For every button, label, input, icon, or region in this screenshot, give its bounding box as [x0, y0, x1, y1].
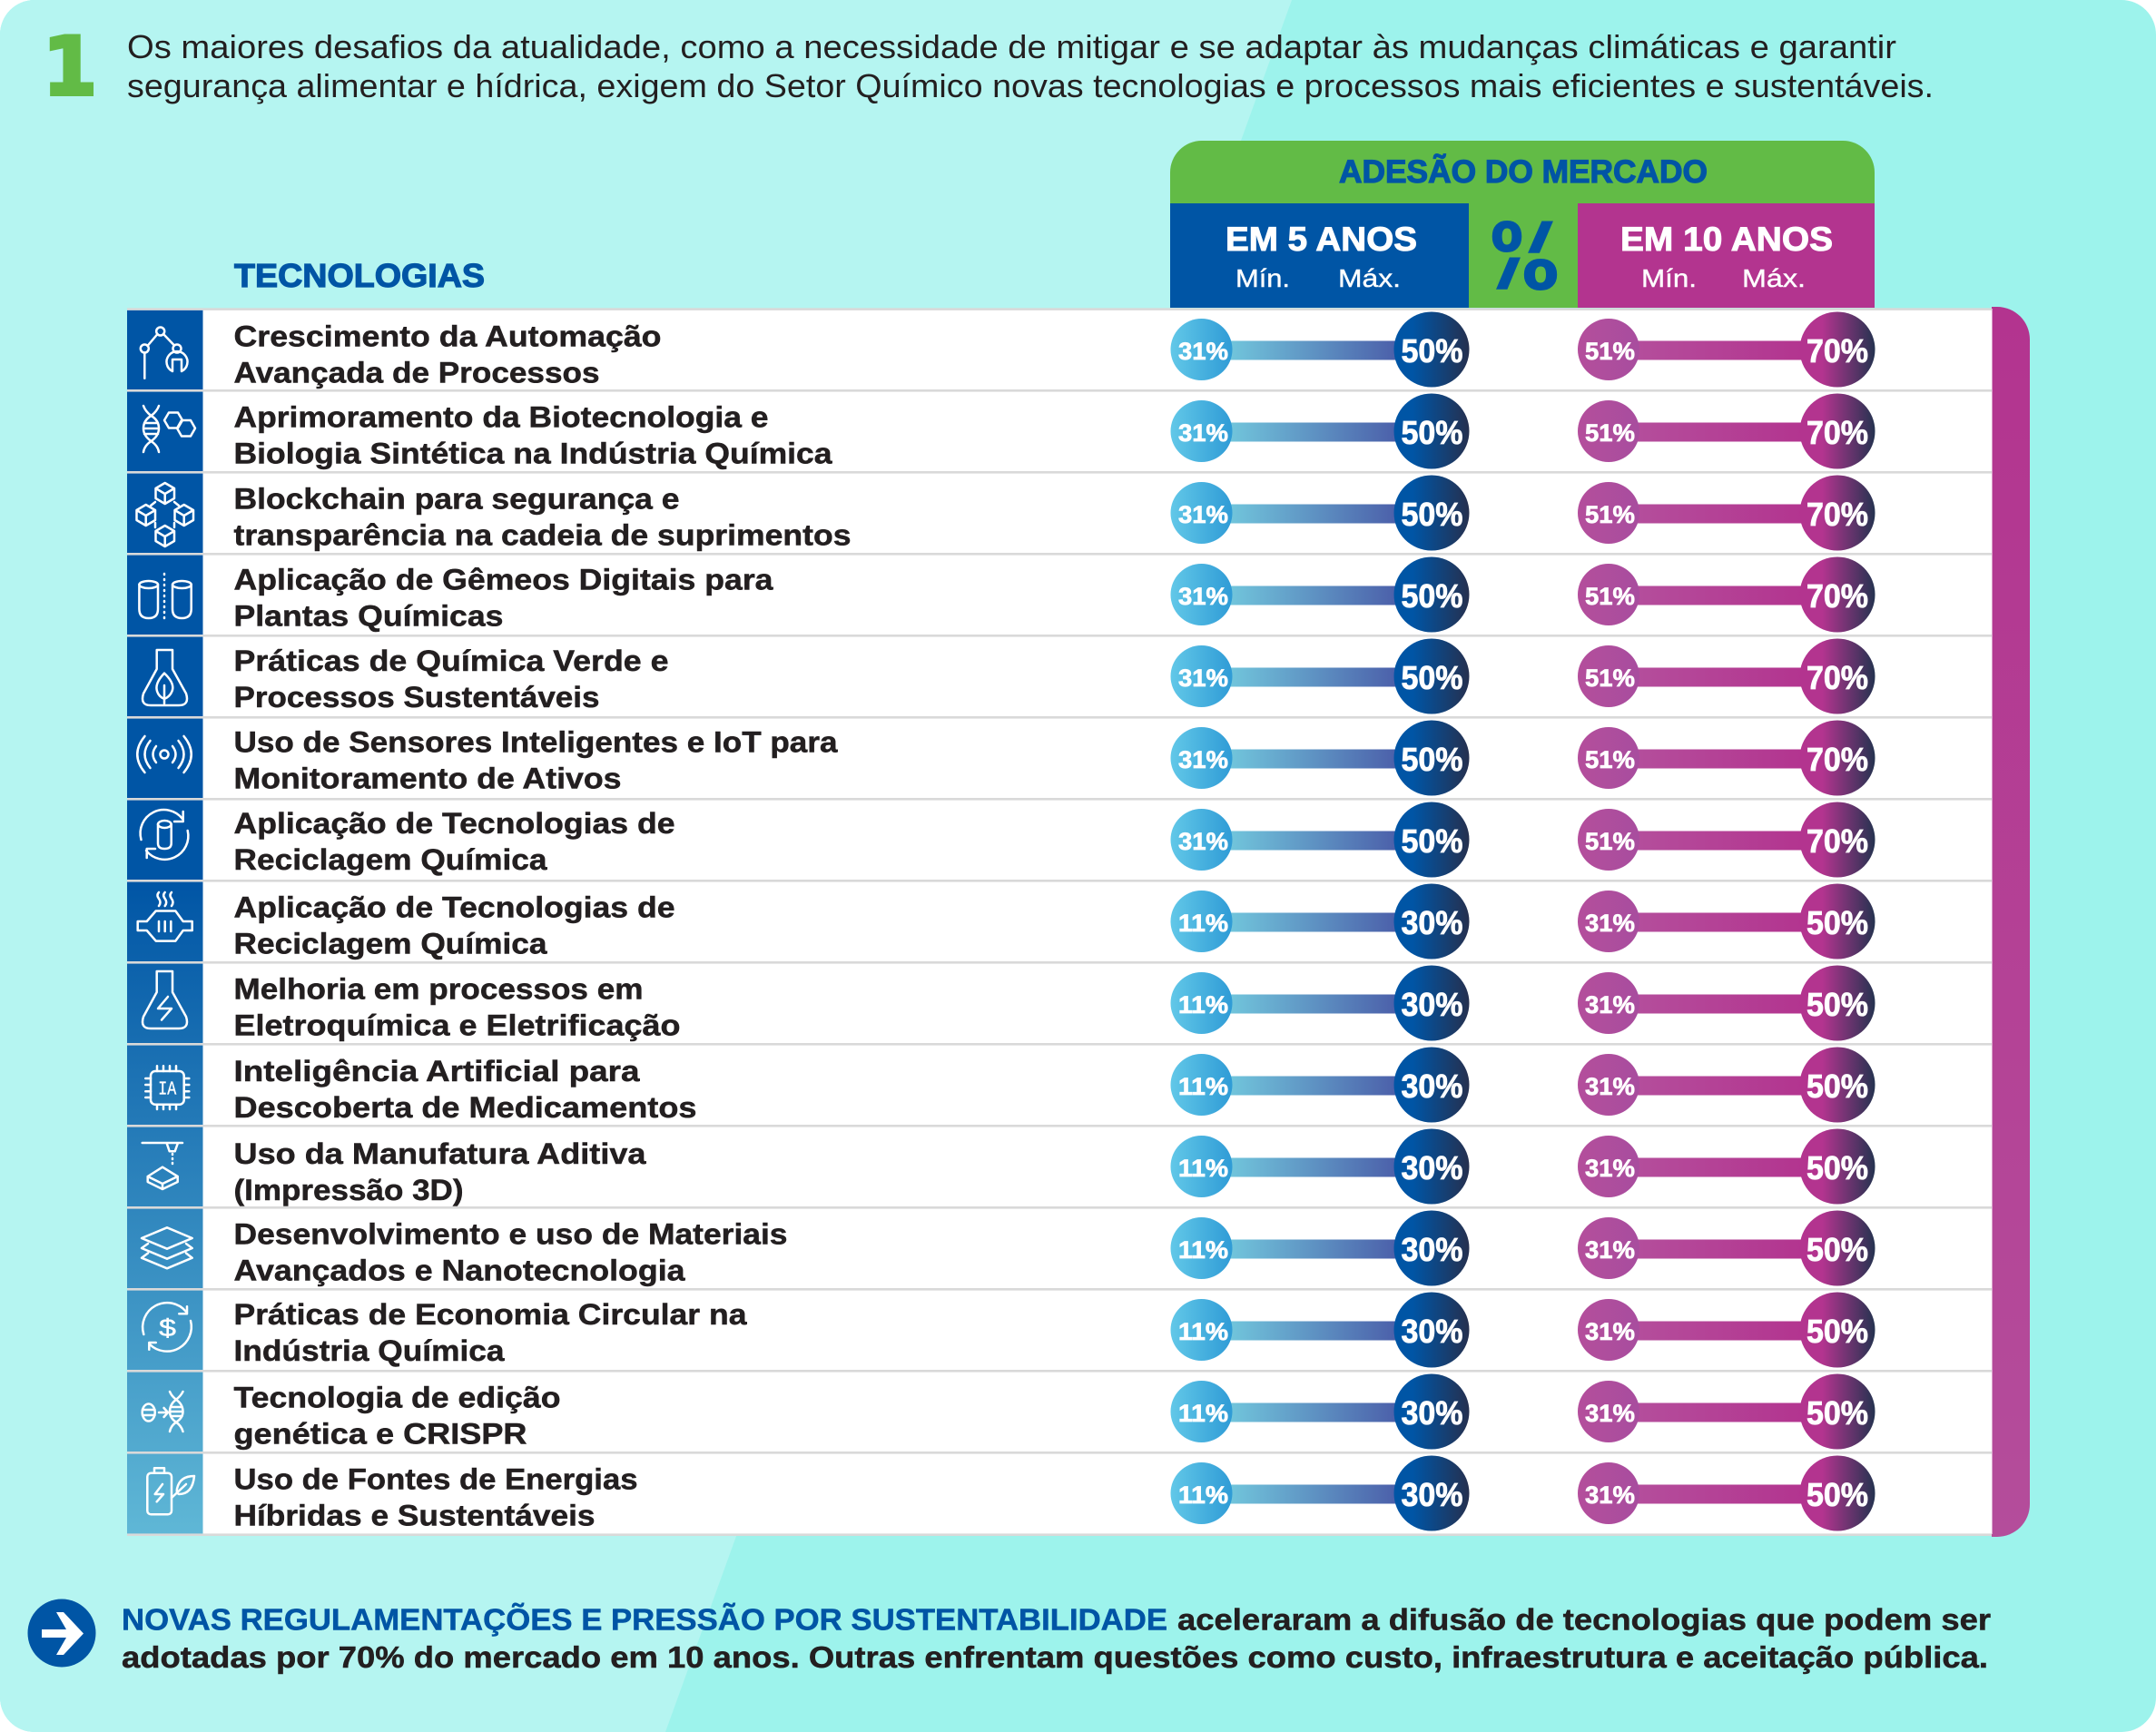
icon: 3d printer — [143, 1143, 182, 1189]
row 3 — [136, 476, 1875, 552]
panel: icon column — [127, 309, 203, 1534]
gauge: 10 anos — [1578, 312, 1875, 387]
gauge: 10 anos: 51% — [1585, 746, 1635, 773]
row 9 — [143, 966, 1875, 1042]
gauge: 10 anos: 51% — [1585, 664, 1635, 692]
row 11 — [143, 1129, 1875, 1206]
percent symbol — [1491, 203, 1558, 300]
label: Reciclagem Química — [234, 928, 547, 960]
icon: circular economy dollar: $ — [159, 1314, 176, 1342]
label — [234, 807, 675, 876]
label: Inteligência Artificial para — [234, 1055, 640, 1087]
gauge: 5 anos: 31% — [1178, 746, 1228, 773]
label: Uso de Sensores Inteligentes e IoT para — [234, 726, 838, 759]
row 2 — [143, 394, 1875, 470]
gauge: 10 anos: 70% — [1807, 577, 1868, 615]
panel: purple side bar — [1992, 307, 2030, 1537]
gauge: 10 anos: 31% — [1585, 1318, 1635, 1345]
label: Aplicação de Tecnologias de — [234, 891, 675, 924]
gauge: 5 anos: 31% — [1178, 501, 1228, 528]
icon: recycling cylinder — [141, 810, 188, 860]
gauge: 10 anos: 31% — [1585, 910, 1635, 937]
gauge: 5 anos: 50% — [1402, 577, 1463, 615]
heading: adesão do mercado: ADESÃO DO MERCADO — [1339, 154, 1708, 190]
intro text: Os maiores desafios da atualidade, como a necessidade de mitigar e se adaptar às mudanças climáticas e garantir — [127, 28, 1896, 65]
gauge: 10 anos: 31% — [1585, 1236, 1635, 1264]
gauge: 10 anos: 70% — [1807, 496, 1868, 533]
gauge: 10 anos — [1578, 884, 1875, 959]
label: Aplicação de Tecnologias de — [234, 807, 675, 840]
label: Uso da Manufatura Aditiva — [234, 1137, 646, 1170]
label — [234, 483, 852, 552]
percent symbol: / — [1527, 213, 1554, 261]
row 15 — [147, 1456, 1875, 1532]
gauge: 10 anos: 50% — [1807, 1394, 1868, 1432]
panel: em 5 anos: Máx. — [1338, 264, 1401, 292]
gauge: 5 anos — [1171, 1129, 1469, 1204]
gauge: 10 anos: 31% — [1585, 1073, 1635, 1100]
gauge: 10 anos — [1578, 394, 1875, 468]
percent symbol: o — [1523, 241, 1558, 300]
label: Biologia Sintética na Indústria Química — [234, 438, 832, 470]
icon: stacked layers — [142, 1227, 192, 1268]
label: Descoberta de Medicamentos — [234, 1091, 697, 1124]
percent symbol: / — [1495, 250, 1521, 298]
label — [234, 891, 675, 960]
label: Plantas Químicas — [234, 599, 503, 632]
gauge: 5 anos: 50% — [1402, 741, 1463, 778]
panel: em 5 anos — [1170, 203, 1469, 308]
label: Melhoria em processos em — [234, 973, 643, 1006]
gauge: 10 anos — [1578, 1456, 1875, 1530]
gauge: 5 anos — [1171, 476, 1469, 550]
gauge: 5 anos: 30% — [1402, 904, 1463, 941]
gauge: 10 anos — [1578, 557, 1875, 632]
panel: market adoption header — [1170, 141, 1875, 308]
heading: tecnologias: TECNOLOGIAS — [234, 257, 485, 294]
panel: em 10 anos: EM 10 ANOS — [1620, 221, 1833, 258]
gauge: 5 anos: 11% — [1178, 1400, 1228, 1427]
gauge: 10 anos: 51% — [1585, 828, 1635, 855]
row 6 — [137, 721, 1875, 795]
gauge: 5 anos: 30% — [1402, 1068, 1463, 1105]
gauge: 5 anos — [1171, 966, 1469, 1040]
icon: ai chip: IA — [158, 1080, 177, 1101]
gauge: 10 anos: 31% — [1585, 1155, 1635, 1182]
gauge: 5 anos — [1171, 1456, 1469, 1530]
gauge: 5 anos: 30% — [1402, 1313, 1463, 1350]
gauge: 5 anos: 31% — [1178, 583, 1228, 610]
gauge: 10 anos — [1578, 802, 1875, 877]
footer text: adotadas por 70% do mercado em 10 anos. Outras enfrentam questões como custo, infraestrutura e aceitação pública. — [122, 1640, 1988, 1674]
gauge: 10 anos — [1578, 1374, 1875, 1449]
icon: blockchain cubes — [136, 483, 193, 546]
label — [234, 726, 838, 795]
gauge: 5 anos — [1171, 721, 1469, 795]
label: Práticas de Economia Circular na — [234, 1298, 747, 1331]
gauge: 10 anos: 51% — [1585, 583, 1635, 610]
footer text: aceleraram a difusão de tecnologias que podem ser — [1177, 1603, 1991, 1636]
gauge: 10 anos — [1578, 1129, 1875, 1204]
label — [234, 1137, 646, 1206]
gauge: 10 anos: 50% — [1807, 986, 1868, 1023]
gauge: 5 anos — [1171, 1374, 1469, 1449]
icon: catalytic converter — [138, 892, 192, 941]
gauge: 5 anos — [1171, 1048, 1469, 1122]
label — [234, 645, 668, 713]
label — [234, 1218, 788, 1287]
gauge: 5 anos: 11% — [1178, 1073, 1228, 1100]
gauge: 5 anos: 30% — [1402, 986, 1463, 1023]
row 14 — [143, 1374, 1875, 1451]
icon: arrow callout — [27, 1599, 96, 1667]
gauge: 5 anos: 31% — [1178, 828, 1228, 855]
gauge: 5 anos — [1171, 1211, 1469, 1285]
icon: robotic arm — [141, 327, 187, 379]
footer text: NOVAS REGULAMENTAÇÕES E PRESSÃO POR SUSTENTABILIDADE — [122, 1603, 1167, 1636]
gauge: 10 anos: 70% — [1807, 414, 1868, 451]
label: Aprimoramento da Biotecnologia e — [234, 401, 768, 434]
label — [234, 973, 681, 1042]
row 10 — [145, 1048, 1875, 1124]
label: Indústria Química — [234, 1334, 505, 1367]
gauge: 5 anos — [1171, 312, 1469, 387]
footer text — [122, 1603, 1991, 1674]
row 4 — [139, 557, 1875, 632]
row 12 — [142, 1211, 1875, 1287]
row 7 — [141, 802, 1875, 877]
gauge: 10 anos: 50% — [1807, 1313, 1868, 1350]
gauge: 5 anos — [1171, 802, 1469, 877]
gauge: 10 anos — [1578, 966, 1875, 1040]
label: Avançados e Nanotecnologia — [234, 1255, 685, 1287]
icon: flask with bolt — [143, 971, 187, 1028]
label: genética e CRISPR — [234, 1418, 527, 1451]
gauge: 5 anos: 11% — [1178, 910, 1228, 937]
panel: em 10 anos: Mín. — [1641, 264, 1697, 292]
gauge: 10 anos: 31% — [1585, 1481, 1635, 1509]
label: Processos Sustentáveis — [234, 681, 599, 713]
label: Híbridas e Sustentáveis — [234, 1500, 596, 1532]
label: Reciclagem Química — [234, 843, 547, 876]
gauge: 10 anos — [1578, 1293, 1875, 1367]
icon: circular economy dollar — [143, 1303, 192, 1352]
label: Aplicação de Gêmeos Digitais para — [234, 563, 773, 595]
label: Crescimento da Automação — [234, 320, 661, 352]
gauge: 10 anos: 31% — [1585, 1400, 1635, 1427]
gauge: 5 anos — [1171, 557, 1469, 632]
icon: ai chip — [145, 1066, 189, 1109]
gauge: 10 anos: 70% — [1807, 332, 1868, 369]
gauge: 5 anos: 11% — [1178, 1236, 1228, 1264]
gauge: 5 anos: 50% — [1402, 332, 1463, 369]
gauge: 5 anos — [1171, 394, 1469, 468]
gauge: 5 anos: 30% — [1402, 1149, 1463, 1186]
gauge: 5 anos: 30% — [1402, 1394, 1463, 1432]
gauge: 5 anos: 50% — [1402, 496, 1463, 533]
gauge: 10 anos: 51% — [1585, 419, 1635, 447]
label: transparência na cadeia de suprimentos — [234, 519, 852, 552]
gauge: 10 anos: 70% — [1807, 659, 1868, 696]
label: (Impressão 3D) — [234, 1174, 463, 1206]
label — [234, 320, 661, 389]
gauge: 10 anos — [1578, 721, 1875, 795]
label: Eletroquímica e Eletrificação — [234, 1009, 681, 1042]
gauge: 10 anos: 51% — [1585, 338, 1635, 365]
icon: gene editing — [143, 1392, 183, 1432]
icon: dna and molecule — [143, 406, 195, 452]
row 5 — [143, 639, 1875, 713]
section number: 1 — [43, 20, 97, 113]
percent symbol: o — [1491, 203, 1522, 262]
gauge: 10 anos: 70% — [1807, 741, 1868, 778]
icon: battery with leaf — [147, 1468, 194, 1514]
gauge: 10 anos: 70% — [1807, 822, 1868, 860]
label: Blockchain para segurança e — [234, 483, 679, 516]
icon: signal sensor — [137, 736, 192, 773]
gauge: 5 anos — [1171, 1293, 1469, 1367]
gauge: 10 anos: 50% — [1807, 1068, 1868, 1105]
gauge: 5 anos: 50% — [1402, 414, 1463, 451]
label: Desenvolvimento e uso de Materiais — [234, 1218, 788, 1251]
gauge: 10 anos: 50% — [1807, 1476, 1868, 1513]
panel: table body — [203, 309, 1992, 1534]
label: Tecnologia de edição — [234, 1382, 561, 1414]
gauge: 5 anos: 11% — [1178, 1318, 1228, 1345]
panel: em 5 anos: Mín. — [1236, 264, 1290, 292]
gauge: 5 anos: 31% — [1178, 338, 1228, 365]
label — [234, 401, 832, 470]
gauge: 5 anos: 11% — [1178, 991, 1228, 1019]
gauge: 5 anos: 30% — [1402, 1231, 1463, 1268]
row 13 — [143, 1293, 1875, 1367]
gauge: 10 anos — [1578, 639, 1875, 713]
gauge: 5 anos: 11% — [1178, 1155, 1228, 1182]
gauge: 10 anos: 50% — [1807, 904, 1868, 941]
icon: digital twin cylinders — [139, 574, 192, 622]
label — [234, 563, 773, 632]
gauge: 10 anos — [1578, 1211, 1875, 1285]
gauge: 5 anos: 31% — [1178, 664, 1228, 692]
label: Práticas de Química Verde e — [234, 645, 668, 677]
gauge: 10 anos — [1578, 1048, 1875, 1122]
gauge: 5 anos: 11% — [1178, 1481, 1228, 1509]
label: Avançada de Processos — [234, 356, 599, 389]
label — [234, 1463, 637, 1532]
row 8 — [138, 884, 1875, 960]
panel: em 10 anos: Máx. — [1742, 264, 1806, 292]
gauge: 5 anos: 30% — [1402, 1476, 1463, 1513]
intro text — [127, 28, 1934, 104]
gauge: 5 anos — [1171, 884, 1469, 959]
gauge: 5 anos: 50% — [1402, 822, 1463, 860]
gauge: 10 anos — [1578, 476, 1875, 550]
gauge: 5 anos: 31% — [1178, 419, 1228, 447]
row 1 — [141, 312, 1875, 389]
icon: flask with leaf — [143, 650, 187, 705]
gauge: 5 anos: 50% — [1402, 659, 1463, 696]
intro text: segurança alimentar e hídrica, exigem do Setor Químico novas tecnologias e processos mais eficientes e sustentáveis. — [127, 67, 1934, 104]
panel: em 5 anos: EM 5 ANOS — [1226, 221, 1417, 258]
gauge: 10 anos: 50% — [1807, 1149, 1868, 1186]
gauge: 10 anos: 31% — [1585, 991, 1635, 1019]
label: Uso de Fontes de Energias — [234, 1463, 637, 1496]
label: Monitoramento de Ativos — [234, 763, 621, 795]
panel: em 10 anos — [1578, 203, 1875, 308]
label — [234, 1298, 747, 1367]
label — [234, 1055, 697, 1124]
label — [234, 1382, 561, 1451]
gauge: 10 anos: 51% — [1585, 501, 1635, 528]
gauge: 5 anos — [1171, 639, 1469, 713]
gauge: 10 anos: 50% — [1807, 1231, 1868, 1268]
